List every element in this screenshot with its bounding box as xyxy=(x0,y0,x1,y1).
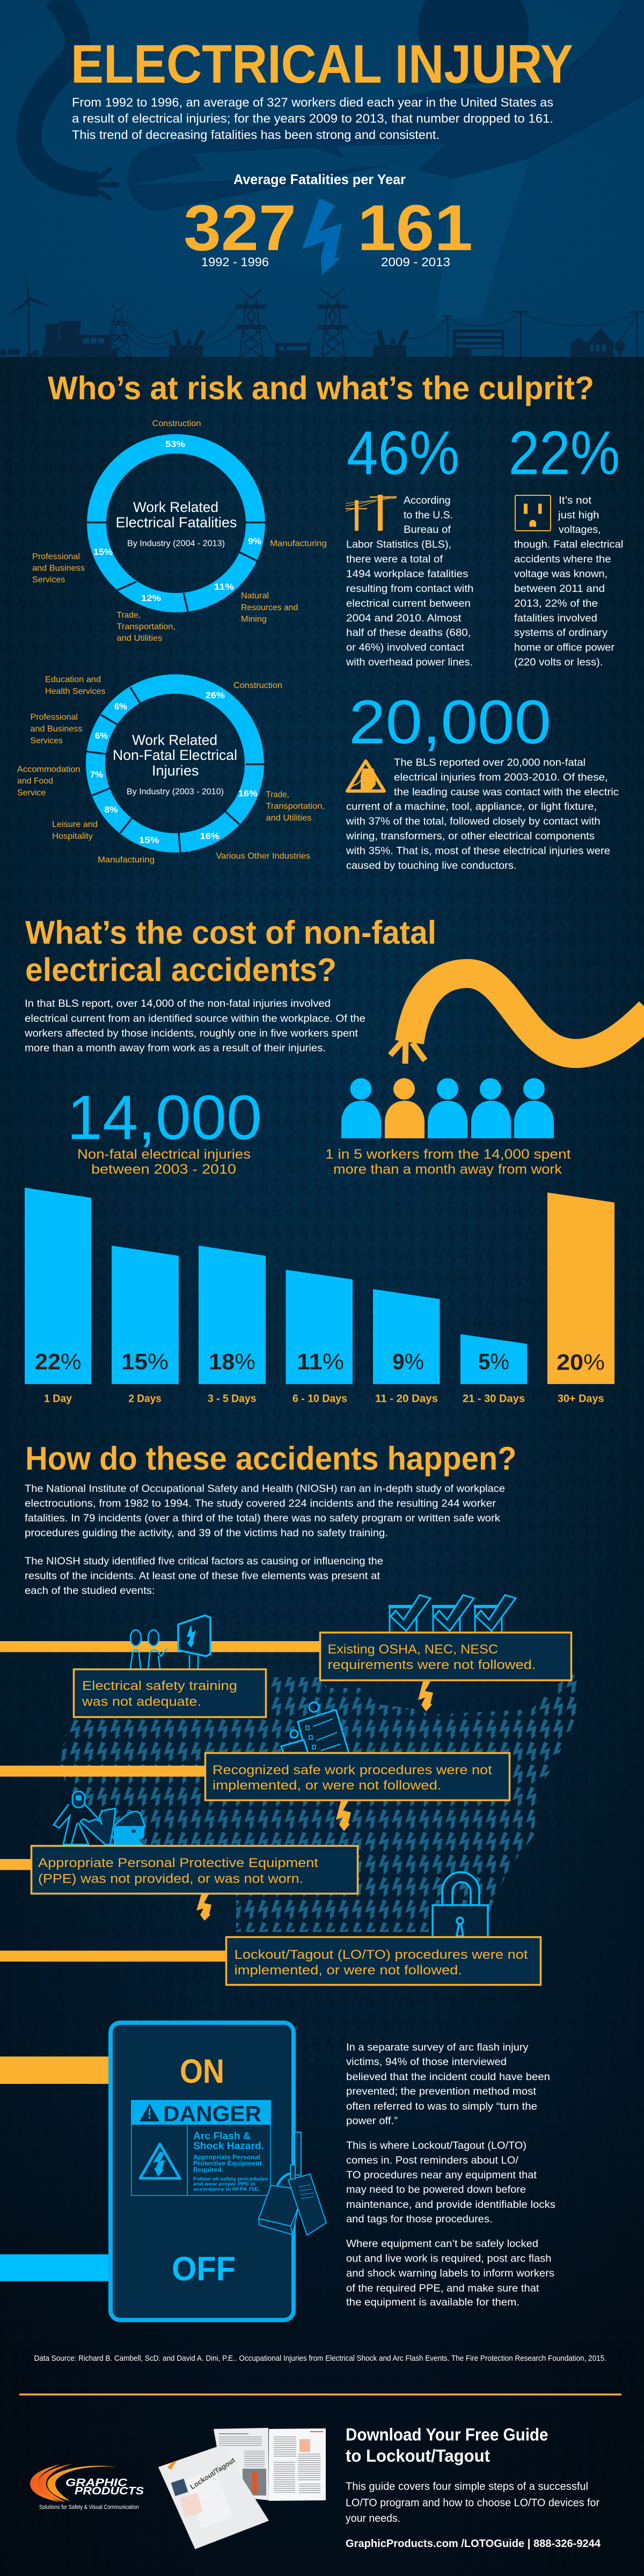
bar: 6 to 10 days: 11% xyxy=(297,1349,344,1374)
bar: 6 to 10 days: 6 - 10 Days xyxy=(292,1393,347,1405)
chart: fatalities donut: Mining xyxy=(241,615,267,624)
chart: fatalities donut: Manufacturing xyxy=(270,539,327,548)
bar: 21 to 30 days: 21 - 30 Days xyxy=(463,1393,525,1405)
text block: cost of accidents: In that BLS report, over 14,000 of the non-fatal injuries involved xyxy=(25,998,331,1009)
bar: 11 to 20 days: 9% xyxy=(392,1349,424,1374)
icon: wind turbine xyxy=(8,274,55,357)
stat: 46 percent power lines: Labor Statistics (BLS), xyxy=(346,539,451,551)
icon: three check boxes xyxy=(389,1595,516,1631)
pictogram: 1 in 5 workers xyxy=(325,1078,571,1177)
icon: power plant xyxy=(0,321,118,357)
chart: fatalities donut: Work Related xyxy=(133,499,218,515)
stat: 22 percent low voltage: systems of ordinary xyxy=(514,627,608,639)
callout: lockout tagout: implemented, or were not followed. xyxy=(235,1963,462,1978)
chart: fatalities donut: 53% xyxy=(165,439,185,449)
stat: 20,000 non-fatal injuries: current of a machine, tool, appliance, or light fixture, xyxy=(346,801,597,813)
call to action: download guide: GraphicProducts.com /LOTOGuide | 888-326-9244 xyxy=(346,2538,601,2550)
text block: lockout tagout explanation: victims, 94% of those interviewed xyxy=(346,2056,507,2068)
icon: electrical outlet xyxy=(515,495,551,531)
icon: training presenters and sign xyxy=(130,1615,210,1669)
icon: lightning bolt xyxy=(336,1801,351,1831)
stat: 46 percent power lines: there were a total of xyxy=(346,554,443,565)
chart: non-fatal injuries donut: Injuries xyxy=(152,763,199,779)
chart: fatalities donut: Construction xyxy=(152,419,201,428)
icon: utility poles xyxy=(443,311,644,357)
danger label xyxy=(131,2100,270,2196)
stat: 22 percent low voltage: It’s not xyxy=(559,495,592,507)
icon: substation box xyxy=(275,343,310,357)
stat: 14,000 injuries: between 2003 - 2010 xyxy=(91,1162,236,1177)
chart: fatalities donut: Services xyxy=(32,575,65,584)
chart: fatalities donut: and Business xyxy=(32,564,85,573)
stat: 46 percent power lines: 2004 and 2010. Almost xyxy=(346,613,462,624)
bar: 1 day: 22% xyxy=(35,1349,82,1374)
chart: fatalities donut: Resources and xyxy=(241,603,298,612)
chart: fatalities donut: 11% xyxy=(214,582,234,592)
icon: clipboards xyxy=(281,1702,349,1753)
intro paragraph: This trend of decreasing fatalities has been strong and consistent. xyxy=(72,128,440,142)
text block: cost of accidents: workers affected by those incidents, roughly one in five workers spent xyxy=(24,1027,358,1039)
bar: 6 to 10 days xyxy=(286,1270,353,1405)
icon: warning triangle with hand xyxy=(347,761,384,791)
call to action: download guide: LO/TO program and how to choose LO/TO devices for xyxy=(346,2497,599,2509)
panel: disconnect switch xyxy=(111,2023,294,2320)
chart: non-fatal injuries donut: Accommodation xyxy=(17,765,80,774)
callout: personal protective equipment xyxy=(31,1846,357,1893)
call to action: download guide: Download Your Free Guide xyxy=(346,2425,548,2444)
stat: 46 percent power lines: 46% xyxy=(347,419,459,488)
bar: 2 days xyxy=(112,1246,179,1405)
icon: lightning bolt xyxy=(418,1681,433,1711)
chart: fatalities donut: and Utilities xyxy=(117,634,162,643)
text block: lockout tagout explanation: believed that the incident could have been xyxy=(346,2071,550,2083)
logo: Graphic Products: Solutions for Safety & Visual Communication xyxy=(39,2504,139,2511)
icon: protective equipment figures xyxy=(54,1791,145,1845)
chart: fatalities donut: Transportation, xyxy=(117,623,175,631)
chart: non-fatal injuries donut: Work Related xyxy=(132,732,217,748)
chart: fatalities donut xyxy=(32,419,327,643)
stat: 22 percent low voltage: fatalities involved xyxy=(514,613,597,624)
text block: NIOSH study: each of the studied events: xyxy=(25,1585,155,1597)
callout: safety training xyxy=(74,1669,266,1717)
stat: 14,000 injuries: Non-fatal electrical injuries xyxy=(77,1147,251,1162)
chart: non-fatal injuries donut: Health Services xyxy=(45,687,105,696)
stat: 22 percent low voltage: just high xyxy=(558,510,599,521)
stat: 22 percent low voltage: voltage was known, xyxy=(514,569,608,580)
stat: 22 percent low voltage: between 2011 and xyxy=(514,583,605,595)
stat: 46 percent power lines: resulting from contact with xyxy=(346,583,473,595)
bar: 21 to 30 days xyxy=(460,1334,527,1405)
chart: non-fatal injuries donut: Services xyxy=(30,736,63,745)
text block: NIOSH study: fatalities. In 79 incidents (over a third of the total) there was no safety program or written safe work xyxy=(25,1512,500,1524)
text block: lockout tagout explanation: and tags for those procedures. xyxy=(346,2213,493,2225)
icon: office building xyxy=(453,330,504,357)
text block: lockout tagout explanation: Where equipment can’t be safely locked xyxy=(346,2238,538,2250)
callout: safe work procedures: Recognized safe work procedures were not xyxy=(213,1763,492,1777)
text block: NIOSH study: procedures guiding the activity, and 39 of the victims had no safety training. xyxy=(25,1527,388,1539)
average fatalities stat: 327 xyxy=(184,191,296,264)
callout: safety training: Electrical safety training xyxy=(82,1679,237,1693)
chart: non-fatal injuries donut: 26% xyxy=(206,690,225,700)
stat: 46 percent power lines: 1494 workplace fatalities xyxy=(346,569,468,580)
stat: 20,000 non-fatal injuries: wiring, transformers, or other electrical components xyxy=(346,831,595,842)
text block: lockout tagout explanation: and shock warning labels to inform workers xyxy=(346,2267,554,2279)
stat: 20,000 non-fatal injuries: caused by touching live conductors. xyxy=(346,860,516,872)
stat: 20,000 non-fatal injuries: the leading cause was contact with the electric xyxy=(394,787,619,798)
title: ELECTRICAL INJURY xyxy=(71,34,573,94)
average fatalities stat xyxy=(184,171,473,275)
callout: safety training: was not adequate. xyxy=(82,1695,201,1709)
chart: non-fatal injuries donut: Construction xyxy=(233,681,282,690)
callout: lockout tagout: Lockout/Tagout (LO/TO) procedures were not xyxy=(235,1948,528,1962)
stat: 46 percent power lines xyxy=(346,419,473,668)
text block: lockout tagout explanation: power off.” xyxy=(346,2115,398,2127)
stat: 22 percent low voltage xyxy=(509,419,623,668)
callout: OSHA requirements xyxy=(320,1633,571,1680)
text block: lockout tagout explanation: of the required PPE, and make sure that xyxy=(346,2282,539,2294)
callout: safe work procedures: implemented, or were not followed. xyxy=(213,1779,441,1793)
skyline illustration xyxy=(0,274,644,357)
average fatalities stat: Average Fatalities per Year xyxy=(233,171,406,187)
call to action: download guide: This guide covers four simple steps of a successful xyxy=(346,2480,588,2492)
text block: lockout tagout explanation: out and live work is required, post arc flash xyxy=(346,2253,552,2265)
chart: non-fatal injuries donut: 8% xyxy=(104,804,118,815)
data source: Data Source: Richard B. Cambell, ScD. and David A. Dini, P.E.. Occupational Injuries from Electrical Shock and Arc Flash Events. The Fire Protection Research Foundation, 2015. xyxy=(34,2354,606,2363)
chart: non-fatal injuries donut xyxy=(17,675,325,865)
panel: hero background with plug illustration xyxy=(0,0,644,357)
bar: 1 day xyxy=(25,1188,91,1405)
danger label: Appropriate Personal xyxy=(193,2154,260,2161)
brochure cover: Lockout/Tagout xyxy=(188,2456,237,2491)
icon: houses xyxy=(570,328,625,357)
chart: non-fatal injuries donut: By Industry (2003 - 2010) xyxy=(127,787,224,796)
chart: fatalities donut: Trade, xyxy=(117,611,141,620)
bar: 2 days: 15% xyxy=(121,1349,169,1374)
chart: fatalities donut: Electrical Fatalities xyxy=(116,514,237,530)
chart: fatalities donut: 12% xyxy=(141,593,161,603)
stat: 22 percent low voltage: voltages, xyxy=(559,524,601,536)
text block: lockout tagout explanation: prevented; the prevention method most xyxy=(346,2085,537,2097)
chart: non-fatal injuries donut: Professional xyxy=(30,713,78,722)
icon: orange electrical cord xyxy=(390,974,644,1064)
stat: 46 percent power lines: with overhead power lines. xyxy=(346,657,473,668)
icon: lightning bolt xyxy=(196,1894,211,1921)
chart: non-fatal injuries donut: Trade, xyxy=(266,791,289,800)
average fatalities stat: 2009 - 2013 xyxy=(381,255,450,269)
switch power bars xyxy=(0,2057,109,2281)
chart: non-fatal injuries donut: 16% xyxy=(200,831,219,841)
danger label: and wear proper PPE in xyxy=(193,2182,255,2187)
chart: non-fatal injuries donut: Various Other Industries xyxy=(216,852,310,861)
danger label: Required. xyxy=(193,2166,223,2174)
bar chart: days away from work xyxy=(25,1188,614,1405)
stat: 22 percent low voltage: though. Fatal electrical xyxy=(514,539,623,551)
chart: non-fatal injuries donut: 15% xyxy=(139,835,159,845)
bar: 3 to 5 days xyxy=(199,1246,266,1405)
stat: 22 percent low voltage: (220 volts or less). xyxy=(514,657,603,668)
intro paragraph: From 1992 to 1996, an average of 327 workers died each year in the United States as xyxy=(72,96,553,109)
logo: Graphic Products xyxy=(30,2464,144,2511)
stat: 46 percent power lines: or 46%) involved contact xyxy=(346,642,465,654)
panel: disconnect switch: OFF xyxy=(172,2250,236,2288)
chart: fatalities donut: Natural xyxy=(241,591,269,601)
chart: fatalities donut: 15% xyxy=(93,547,113,557)
stat: 20,000 non-fatal injuries: with 37% of the total, followed closely by contact with xyxy=(346,816,601,828)
icon: padlock xyxy=(433,1872,488,1937)
call to action: download guide: your needs. xyxy=(346,2513,400,2524)
callout: lockout tagout xyxy=(226,1937,541,1985)
stat: 22 percent low voltage: 22% xyxy=(509,419,620,488)
stat: 20,000 non-fatal injuries: with 35%. That is, most of these electrical injuries were xyxy=(346,846,610,857)
chart: fatalities donut: Professional xyxy=(32,552,80,561)
text block: lockout tagout explanation: In a separate survey of arc flash injury xyxy=(346,2041,529,2053)
callout: personal protective equipment: Appropriate Personal Protective Equipment xyxy=(38,1856,318,1870)
chart: non-fatal injuries donut: and Utilities xyxy=(266,814,311,823)
text block: NIOSH study: results of the incidents. At least one of these five elements was present at xyxy=(25,1570,380,1582)
panel: disconnect switch: ON xyxy=(180,2053,224,2090)
chart: non-fatal injuries donut: Hospitality xyxy=(52,832,93,841)
bar: 11 to 20 days xyxy=(373,1289,440,1405)
chart: non-fatal injuries donut: and Business xyxy=(30,724,82,734)
stat: 20,000 non-fatal injuries: The BLS reported over 20,000 non-fatal xyxy=(394,757,586,769)
text block: NIOSH study xyxy=(25,1483,505,1597)
open spread xyxy=(214,2428,326,2501)
heading: cost of accidents: What’s the cost of non-fatal xyxy=(25,914,436,951)
heading: how accidents happen: How do these accidents happen? xyxy=(25,1440,516,1477)
stat: 20,000 non-fatal injuries: electrical injuries from 2003-2010. Of these, xyxy=(394,772,608,783)
logo: Graphic Products: GRAPHIC xyxy=(65,2477,128,2489)
danger label: DANGER xyxy=(163,2102,261,2126)
chart: non-fatal injuries donut: Leisure and xyxy=(52,820,98,829)
text block: cost of accidents: more than a month away from work as a result of their injuries. xyxy=(25,1042,326,1054)
text block: lockout tagout explanation: TO procedures near any equipment that xyxy=(346,2169,537,2181)
callout: OSHA requirements: requirements were not followed. xyxy=(327,1658,536,1672)
chart: fatalities donut: 9% xyxy=(248,536,261,546)
chart: non-fatal injuries donut: Service xyxy=(17,788,46,797)
callout: personal protective equipment: (PPE) was not provided, or was not worn. xyxy=(38,1872,303,1886)
icon: transmission towers and wires xyxy=(106,289,637,357)
map of lightning bolts xyxy=(59,1669,580,1932)
heading: cost of accidents: electrical accidents? xyxy=(25,952,336,988)
stat: 46 percent power lines: electrical current between xyxy=(346,598,471,609)
call to action: download guide xyxy=(346,2425,601,2550)
text block: NIOSH study: electrocutions, from 1982 to 1994. The study covered 224 incidents and the resulting 244 worker xyxy=(25,1498,496,1510)
stat: 20,000 non-fatal injuries: 20,000 xyxy=(349,688,551,757)
heading: who's at risk: Who’s at risk and what’s the culprit? xyxy=(48,370,594,406)
bar: 30 plus days xyxy=(547,1192,614,1405)
chart: non-fatal injuries donut: Manufacturing xyxy=(98,855,155,865)
stat: 46 percent power lines: half of these deaths (680, xyxy=(346,627,471,639)
pictogram: 1 in 5 workers: more than a month away from work xyxy=(333,1162,562,1177)
bar: 30 plus days: 30+ Days xyxy=(558,1393,604,1405)
bar: 11 to 20 days: 11 - 20 Days xyxy=(375,1393,438,1405)
stat: 46 percent power lines: Bureau of xyxy=(404,524,451,536)
illustration: LO/TO guide brochure xyxy=(158,2428,326,2549)
bar: 21 to 30 days: 5% xyxy=(478,1349,509,1374)
bar: 3 to 5 days: 18% xyxy=(209,1349,255,1374)
brochure cover xyxy=(158,2445,269,2549)
stat: 22 percent low voltage: 2013, 22% of the xyxy=(514,598,598,609)
icon: utility poles xyxy=(346,495,397,531)
chart: non-fatal injuries donut: 6% xyxy=(95,731,108,741)
chart: non-fatal injuries donut: 7% xyxy=(90,770,103,780)
callout: OSHA requirements: Existing OSHA, NEC, NESC xyxy=(327,1642,498,1657)
text block: lockout tagout explanation xyxy=(346,2041,555,2308)
bar: 2 days: 2 Days xyxy=(129,1393,162,1405)
chart: non-fatal injuries donut: Education and xyxy=(45,675,101,684)
text block: NIOSH study: The NIOSH study identified five critical factors as causing or influencing the xyxy=(25,1555,383,1567)
callout: safe work procedures xyxy=(205,1753,510,1800)
pictogram: 1 in 5 workers: 1 in 5 workers from the 14,000 spent xyxy=(325,1147,571,1162)
text block: lockout tagout explanation: the equipment is available for them. xyxy=(346,2296,519,2308)
danger label: accordance to NFPA 70E. xyxy=(193,2186,260,2192)
chart: non-fatal injuries donut: Non-Fatal Electrical xyxy=(113,747,237,763)
divider rule xyxy=(19,2394,621,2396)
stat: 46 percent power lines: According xyxy=(404,495,451,507)
text block: lockout tagout explanation: may need to be powered down before xyxy=(346,2184,526,2196)
bar: 30 plus days: 20% xyxy=(557,1350,605,1375)
chart: non-fatal injuries donut: 16% xyxy=(238,788,258,799)
chart: fatalities donut: By Industry (2004 - 2013) xyxy=(127,539,225,548)
average fatalities stat: 161 xyxy=(357,191,473,264)
call to action: download guide: to Lockout/Tagout xyxy=(346,2446,490,2465)
bar: 3 to 5 days: 3 - 5 Days xyxy=(208,1393,257,1405)
stat: 22 percent low voltage: accidents where the xyxy=(514,554,611,565)
chart: non-fatal injuries donut: and Food xyxy=(17,777,53,786)
chart: non-fatal injuries donut: Transportation, xyxy=(266,802,325,811)
stat: 46 percent power lines: to the U.S. xyxy=(404,510,453,521)
chart: non-fatal injuries donut: 6% xyxy=(114,701,127,712)
text block: lockout tagout explanation: often referred to was to simply “turn the xyxy=(346,2101,537,2112)
intro paragraph xyxy=(72,96,553,142)
text block: lockout tagout explanation: This is where Lockout/Tagout (LO/TO) xyxy=(346,2140,526,2151)
text block: lockout tagout explanation: maintenance, and provide identifiable locks xyxy=(346,2199,555,2211)
icon: padlock and tag on switch xyxy=(259,2132,326,2235)
stat: 22 percent low voltage: home or office power xyxy=(514,642,615,654)
heading: cost of accidents xyxy=(25,914,436,988)
danger label: Follow all safety procedures xyxy=(193,2176,268,2182)
text block: cost of accidents xyxy=(24,998,365,1054)
icon: transformers xyxy=(169,330,409,357)
danger label: Protective Equipment xyxy=(193,2160,262,2167)
danger label: Arc Flash & xyxy=(193,2130,251,2141)
intro paragraph: a result of electrical injuries; for the years 2009 to 2013, that number dropped to 161. xyxy=(72,112,553,126)
text block: lockout tagout explanation: comes in. Post reminders about LO/ xyxy=(346,2154,519,2166)
stat: 14,000 injuries: 14,000 xyxy=(67,1082,262,1153)
average fatalities stat: 1992 - 1996 xyxy=(201,255,269,269)
stat: 20,000 non-fatal injuries xyxy=(346,688,619,872)
connector bars xyxy=(0,1641,322,1962)
text block: NIOSH study: The National Institute of Occupational Safety and Health (NIOSH) ran an in-depth study of workplace xyxy=(25,1483,505,1495)
text block: cost of accidents: electrical current from an identified source within the workplace. Of the xyxy=(25,1013,365,1024)
logo: Graphic Products: PRODUCTS xyxy=(75,2485,144,2497)
danger label: Shock Hazard. xyxy=(193,2140,264,2151)
bar: 1 day: 1 Day xyxy=(44,1393,72,1405)
